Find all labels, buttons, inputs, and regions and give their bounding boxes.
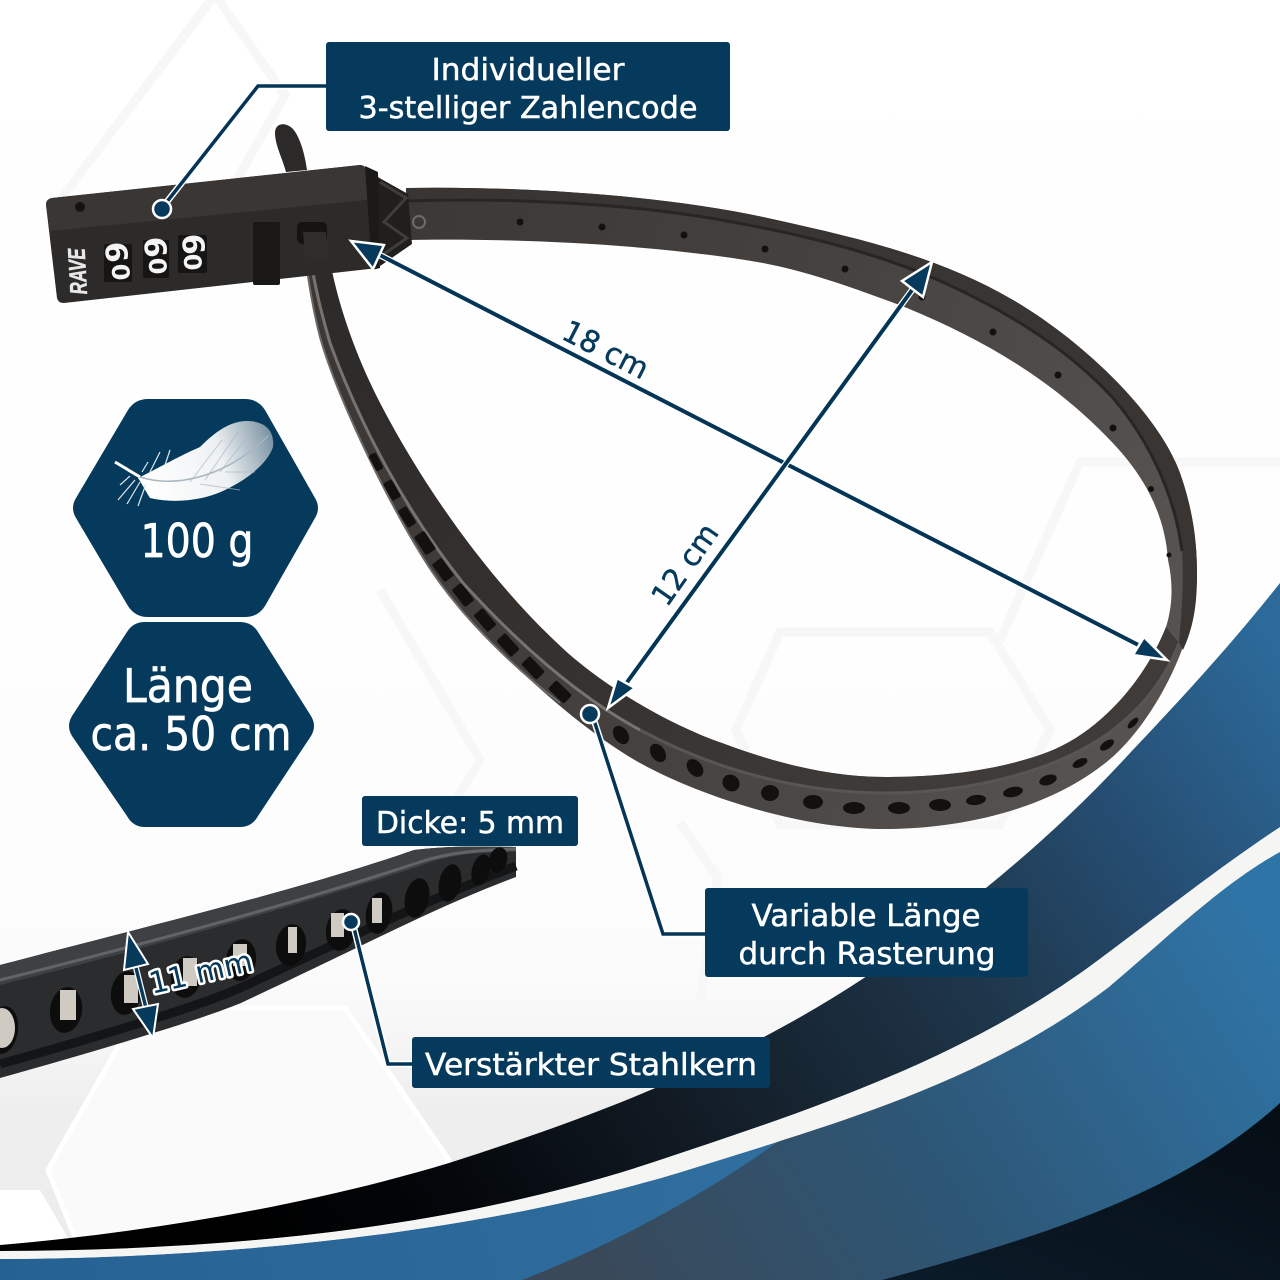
callout: Variable Länge durch Rasterung bbox=[581, 705, 1028, 977]
bottom swoosh: dark corner bbox=[882, 1103, 1280, 1280]
callout: Verstärkter Stahlkern bbox=[343, 914, 770, 1088]
callout: Individueller 3-stelliger Zahlencode: Individueller bbox=[432, 53, 625, 88]
logo: RAVE: RAVE bbox=[64, 247, 93, 295]
icon: feather bbox=[115, 421, 273, 506]
product: combination lock body bbox=[46, 165, 425, 303]
bottom swoosh: muted overlay bbox=[522, 835, 1280, 1280]
product: strap loop bbox=[275, 124, 1197, 829]
hexagon: length ca. 50 cm bbox=[69, 622, 314, 827]
combination wheels bbox=[100, 233, 213, 282]
label: 18 cm: 18 cm bbox=[556, 314, 654, 387]
combination wheels: 9 bbox=[139, 236, 175, 258]
bottom swoosh: dark band bbox=[0, 583, 1280, 1252]
hexagon: length ca. 50 cm: Länge bbox=[123, 659, 253, 713]
combination wheels: 0 bbox=[144, 257, 173, 275]
callout: Dicke 5 mm: Dicke: 5 mm bbox=[376, 806, 564, 841]
detail: strap close-up bbox=[0, 845, 516, 1078]
hexagon: weight 100 g bbox=[73, 399, 318, 617]
combination wheels: 9 bbox=[177, 233, 213, 255]
hexagon: weight 100 g: 100 g bbox=[140, 514, 254, 568]
callout: Variable Länge durch Rasterung: durch Rasterung bbox=[738, 937, 996, 972]
bottom swoosh: blue field bbox=[0, 852, 1280, 1280]
combination wheels: 0 bbox=[107, 263, 136, 281]
hexagon: length ca. 50 cm: ca. 50 cm bbox=[90, 707, 292, 761]
combination wheels: 0 bbox=[179, 253, 208, 271]
label: 11 mm: 11 mm bbox=[146, 944, 256, 1002]
arrow: 18 cm bbox=[351, 241, 1167, 660]
label: 12 cm: 12 cm bbox=[645, 517, 726, 613]
callout: Dicke 5 mm bbox=[362, 796, 578, 846]
callout: Verstärkter Stahlkern: Verstärkter Stahlkern bbox=[425, 1048, 757, 1083]
arrow: 11 mm height bbox=[124, 932, 158, 1038]
callout: Variable Länge durch Rasterung: Variable Länge bbox=[752, 899, 980, 934]
arrow: 12 cm bbox=[608, 262, 932, 708]
callout: Individueller 3-stelliger Zahlencode bbox=[153, 42, 730, 218]
callout: Individueller 3-stelliger Zahlencode: 3-stelliger Zahlencode bbox=[358, 91, 698, 126]
combination wheels: 9 bbox=[100, 241, 136, 263]
bottom swoosh: white stripe bbox=[0, 827, 1280, 1259]
